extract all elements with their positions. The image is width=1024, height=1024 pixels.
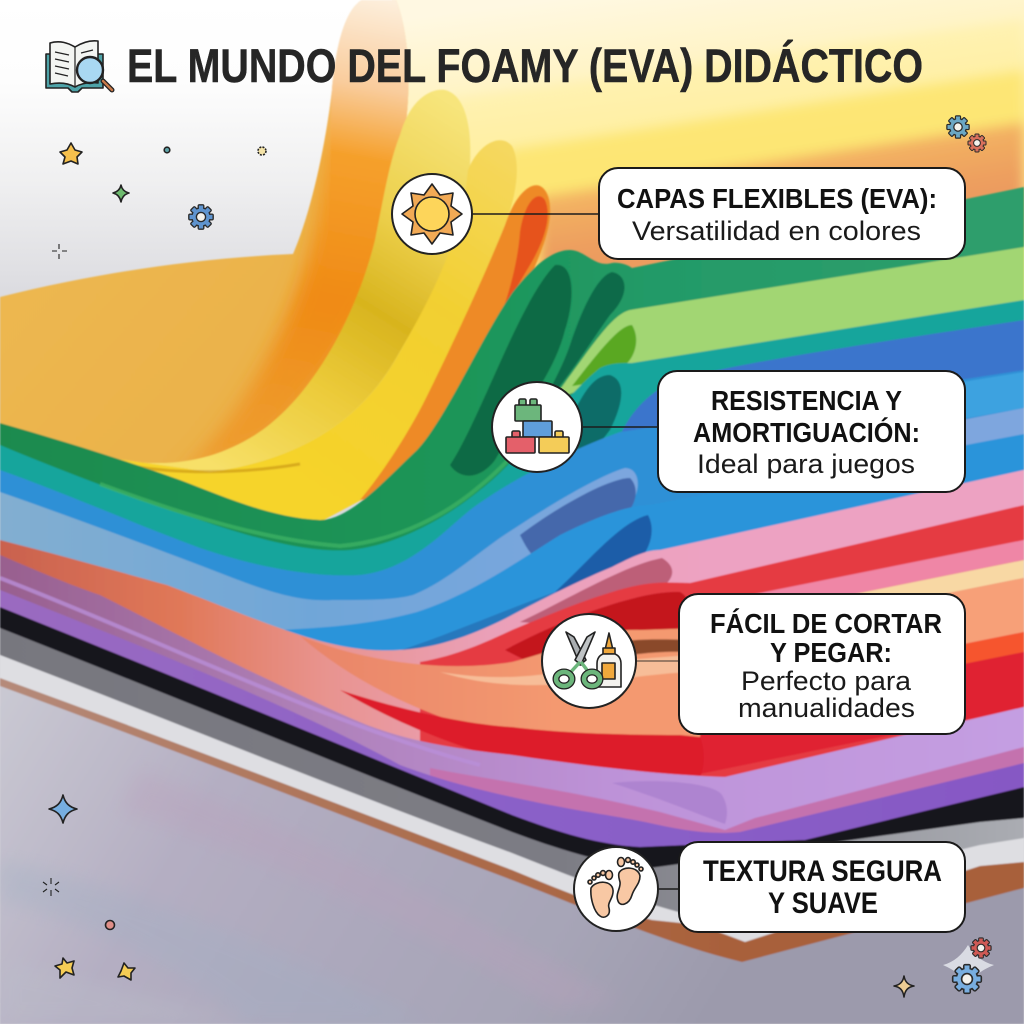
- periwinkle right stripe: [900, 408, 1024, 462]
- white sheet: [0, 655, 1024, 1024]
- orange fold interior: [502, 196, 548, 312]
- yellow fold one: [110, 90, 470, 472]
- icon: small cog: [258, 147, 266, 155]
- top right pale sheets: [392, 0, 1024, 330]
- lilac sheet: [0, 555, 1024, 1024]
- mauve pink band: [430, 747, 1024, 1024]
- light green sheet: [552, 247, 1024, 400]
- icon: open book with magnifier: [46, 41, 112, 92]
- blue sheet: [0, 370, 1024, 1024]
- lilac highlight streak: [0, 578, 480, 765]
- icon: star: [60, 143, 82, 164]
- icon: blue gear: [189, 205, 213, 229]
- peach light stripe: [440, 655, 690, 685]
- icon: red gear: [971, 938, 991, 958]
- right cream stripe: [680, 560, 1024, 647]
- callout: facil de cortar: [679, 594, 965, 734]
- icon: coral dot: [106, 920, 114, 930]
- icon: tan sparkle: [894, 976, 914, 997]
- icon: thin sparkle: [52, 244, 67, 259]
- icon: yellow star right: [118, 963, 135, 980]
- decorations bottom right: [894, 938, 994, 997]
- connector lines: [472, 214, 680, 889]
- right pink stripe: [680, 540, 1024, 629]
- pink fold interior: [520, 558, 672, 625]
- amber shadow line under the yellow folds: [130, 464, 300, 472]
- callout: resistencia: [658, 371, 965, 492]
- table colour reflections: [0, 770, 620, 1024]
- brown fold shadow: [560, 639, 690, 668]
- callout: resistencia: RESISTENCIA Y: [711, 385, 902, 416]
- lilac fold interior: [612, 781, 727, 824]
- table surface: [0, 686, 1024, 1024]
- callout: capas flexibles: [599, 168, 965, 259]
- yellow fold two: [110, 140, 517, 522]
- callout: facil de cortar: Y PEGAR:: [770, 637, 892, 668]
- icon: bare feet badge: [574, 847, 658, 931]
- title group: [46, 39, 923, 92]
- callout: facil de cortar: manualidades: [738, 693, 915, 723]
- dark blue interior: [555, 515, 652, 592]
- black sheet: [0, 607, 1024, 1024]
- dark green second interior: [535, 272, 624, 415]
- icon: white sparkle behind gears: [943, 945, 994, 986]
- back orange sheet: [0, 0, 430, 480]
- icon: dot: [164, 147, 170, 153]
- light blue right stripe: [900, 372, 1024, 430]
- decorations top right: gears: [947, 116, 986, 152]
- callout: capas flexibles: Versatilidad en colores: [632, 216, 921, 246]
- callout: textura segura: Y SUAVE: [768, 887, 878, 920]
- blue lower streak: [395, 572, 640, 652]
- pink and coral sheet: [0, 470, 1024, 1024]
- teal sheet: [0, 300, 1024, 1024]
- icon: sun badge: [392, 174, 472, 254]
- callout: facil de cortar: FÁCIL DE CORTAR: [710, 608, 942, 639]
- teal fold interior: [490, 375, 621, 510]
- icon: burst sparkle: [43, 878, 59, 896]
- gray sheet: [0, 628, 1024, 1024]
- red sheet: [420, 505, 1024, 1024]
- right salmon stripe: [680, 578, 1024, 701]
- icon: blue sparkle: [49, 795, 77, 823]
- icon: blue gear: [953, 965, 981, 993]
- deep blue band: [620, 320, 1024, 436]
- blue second fold sheet: [280, 434, 1024, 1024]
- red lower sheet: [340, 690, 704, 778]
- callout: textura segura: [679, 842, 965, 932]
- callout: resistencia: Ideal para juegos: [697, 449, 915, 479]
- right red stripe: [680, 652, 1024, 778]
- callout: capas flexibles: CAPAS FLEXIBLES (EVA):: [617, 183, 937, 214]
- light blue fold interior: [520, 478, 636, 562]
- icon: yellow star left: [55, 958, 74, 978]
- decorations bottom left: [43, 795, 135, 980]
- dark green fold interior: [450, 265, 572, 476]
- right orange stripe: [680, 632, 1024, 721]
- callout: resistencia: AMORTIGUACIÓN:: [693, 417, 920, 448]
- icon: building blocks badge: [492, 382, 582, 472]
- brown sheet: [0, 678, 1024, 1024]
- peach sheet left of callout: [300, 628, 700, 745]
- dark red fold interior: [505, 592, 692, 668]
- light blue fold sheet: [0, 468, 638, 700]
- purple sheet: [0, 590, 1024, 1024]
- decorations top left: [52, 143, 266, 259]
- green highlight streak: [100, 395, 565, 546]
- light green interior: [572, 325, 636, 386]
- callout: textura segura: TEXTURA SEGURA: [703, 855, 942, 888]
- orange fold: [360, 185, 550, 500]
- icon: scissors and glue badge: [542, 614, 636, 708]
- callout: facil de cortar: Perfecto para: [741, 666, 912, 696]
- icon: green sparkle: [113, 185, 129, 202]
